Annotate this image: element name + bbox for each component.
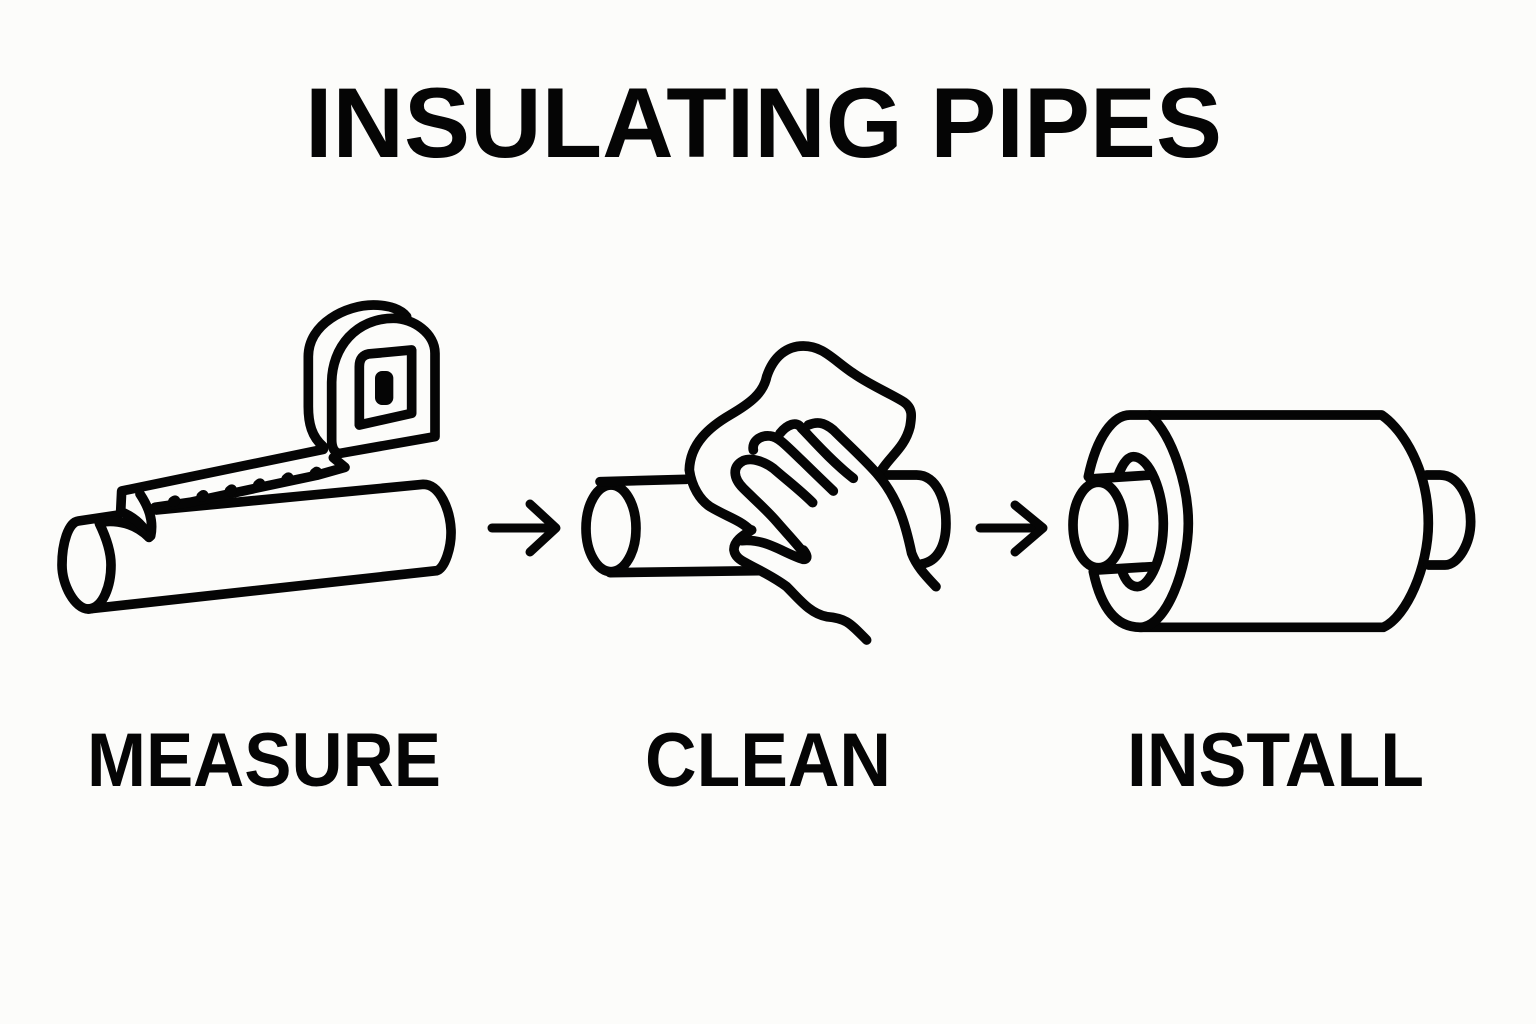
hand [734,423,936,640]
icon: insulated pipe [1073,415,1471,627]
label: clean: CLEAN [645,718,891,803]
tape measure hub [375,371,393,405]
pipe being cleaned [586,475,946,573]
insulation sleeve [1088,415,1428,627]
arrow: clean to install [980,505,1043,552]
icon: tape measure on pipe [62,305,451,609]
inner pipe end [1073,475,1152,570]
tape measure case [308,305,435,453]
icon: hand wiping pipe with cloth [586,346,946,640]
arrow: measure to clean [492,504,556,552]
pipe being measured [62,484,451,609]
cloth [689,346,911,530]
label: install: INSTALL [1127,718,1424,803]
tape blade with hook and ticks [121,449,345,537]
pipe exit on the right [1427,475,1471,565]
label: measure: MEASURE [87,718,441,803]
title: INSULATING PIPES [305,67,1222,178]
